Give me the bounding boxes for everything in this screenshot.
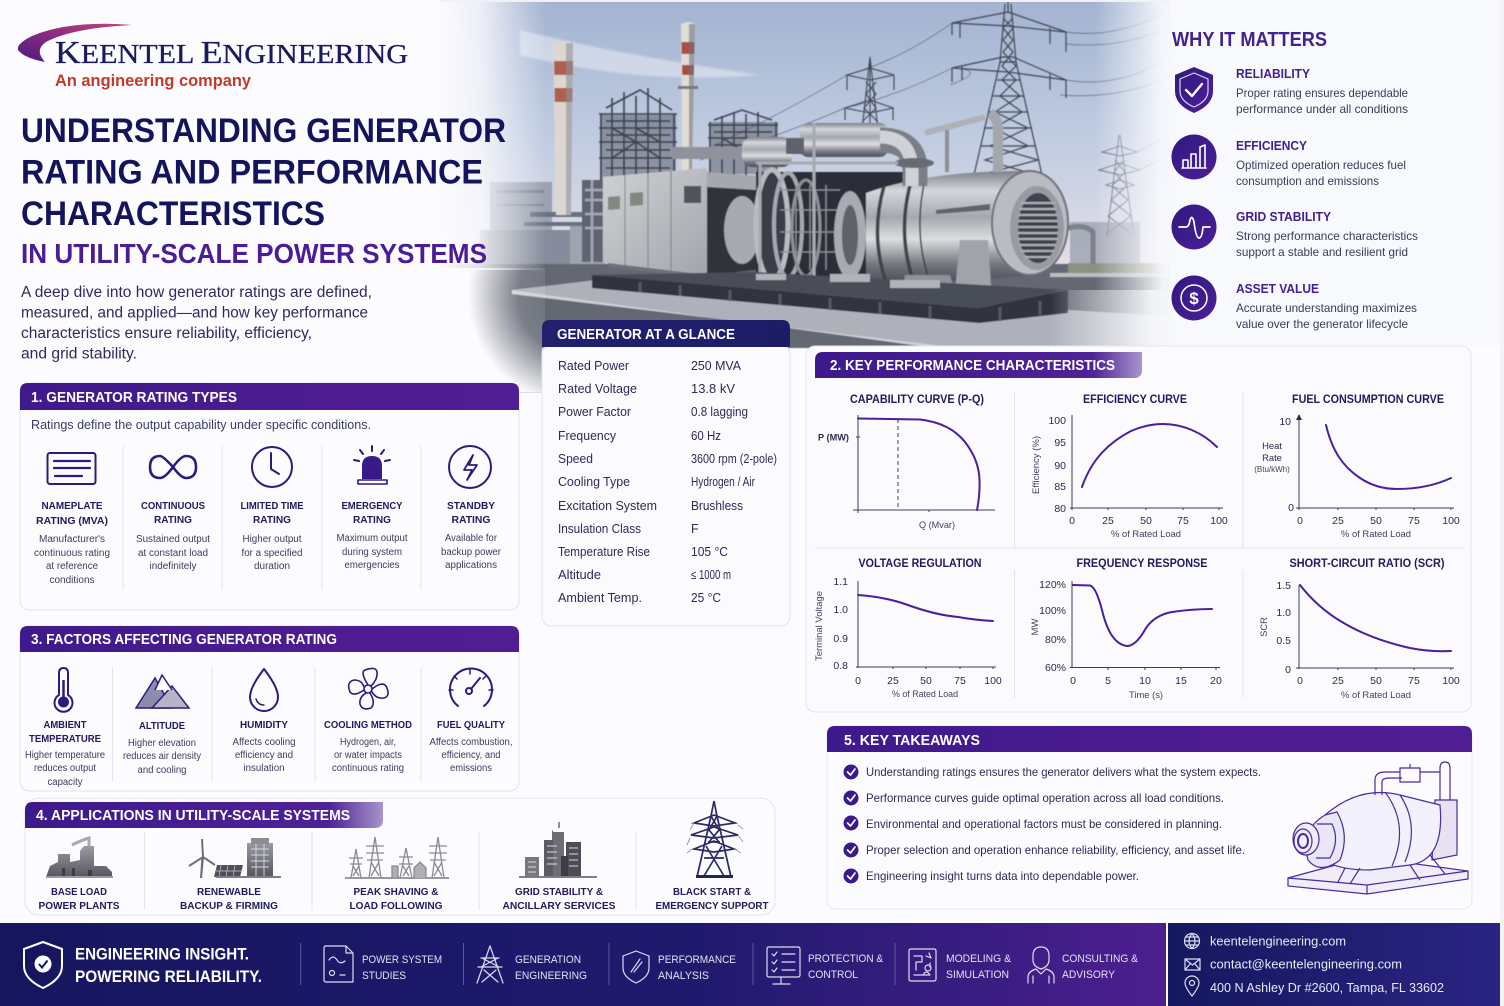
- rating: limited time: LIMITED TIME: [240, 500, 304, 512]
- glance spec table: Cooling Type: [558, 475, 630, 489]
- rating: nameplate: NAMEPLATE: [42, 500, 102, 512]
- chart: short-circuit ratio: 50: [1370, 675, 1382, 687]
- rating: emergency: RATING: [353, 514, 391, 526]
- rating: emergency: Maximum output: [336, 533, 408, 544]
- application: black start: BLACK START &: [673, 886, 751, 898]
- chart: short-circuit ratio: % of Rated Load: [1341, 689, 1411, 700]
- application: base load plants: [38, 838, 120, 912]
- application: renewable backup: BACKUP & FIRMING: [180, 900, 278, 912]
- factor: cooling method: or water impacts: [334, 750, 402, 761]
- factor: ambient temperature: TEMPERATURE: [29, 733, 101, 745]
- rating: standby: STANDBY: [447, 500, 495, 512]
- chart: short-circuit ratio: 75: [1408, 675, 1420, 687]
- glance spec table: 0.8 lagging: [691, 405, 748, 419]
- chart: capability curve: P (MW): [818, 432, 849, 444]
- application: peak shaving: [345, 837, 449, 912]
- chart: efficiency curve: Efficiency (%): [1030, 436, 1041, 494]
- application: peak shaving: LOAD FOLLOWING: [350, 900, 442, 912]
- chart: efficiency curve: 90: [1054, 460, 1066, 472]
- refinery structure two: [708, 110, 778, 175]
- service: generation engineering: GENERATION: [515, 954, 581, 966]
- chart: capability curve: Q (Mvar): [919, 519, 955, 530]
- service: protection and control: PROTECTION &: [808, 953, 884, 965]
- chart: efficiency curve: 75: [1177, 515, 1189, 527]
- service: power system studies: [324, 946, 442, 982]
- rating: limited time: duration: [254, 561, 290, 572]
- footer slogan: ENGINEERING INSIGHT.: [75, 946, 249, 964]
- intro paragraph: A deep dive into how generator ratings are defined,: [21, 284, 372, 301]
- chart: frequency response: 0: [1070, 675, 1076, 687]
- chart: frequency response: MW: [1029, 619, 1040, 635]
- intro paragraph: [21, 284, 372, 362]
- factor: cooling method: COOLING METHOD: [324, 719, 412, 731]
- factor: humidity: Affects cooling: [232, 737, 296, 748]
- glance spec table: Excitation System: [558, 499, 657, 513]
- chart: efficiency curve: 100: [1210, 515, 1228, 527]
- chart: frequency response: 80%: [1045, 634, 1066, 646]
- factor: fuel quality: emissions: [450, 763, 492, 774]
- glance spec table: Brushless: [691, 499, 743, 513]
- service: protection and control: CONTROL: [808, 969, 858, 981]
- factor: fuel quality: Affects combustion,: [430, 737, 512, 748]
- chart: frequency response: 120%: [1039, 579, 1066, 591]
- glance spec table: Rated Power: [558, 359, 629, 373]
- chart: efficiency curve: 80: [1054, 503, 1066, 515]
- rating: continuous: CONTINUOUS: [141, 500, 205, 512]
- rating: continuous: Sustained output: [136, 534, 210, 545]
- transmission tower right: [1099, 135, 1139, 236]
- concrete pad: [512, 280, 1180, 348]
- factor: altitude: reduces air density: [123, 751, 201, 762]
- chart: frequency response: [1029, 558, 1222, 700]
- chart: frequency response: 60%: [1045, 662, 1066, 674]
- chart: short-circuit ratio: 1.0: [1276, 607, 1291, 619]
- rating: limited time: RATING: [253, 514, 291, 526]
- upper exhaust pipes: [742, 113, 998, 278]
- glance spec table: [558, 359, 777, 605]
- chart: efficiency curve: % of Rated Load: [1111, 528, 1181, 539]
- service: consulting and advisory: ADVISORY: [1062, 969, 1116, 981]
- rating: nameplate: Manufacturer's: [39, 534, 105, 545]
- service: generation engineering: ENGINEERING: [515, 970, 587, 982]
- service: modeling and simulation: [909, 949, 1012, 981]
- factor: ambient temperature: capacity: [48, 777, 82, 788]
- rating: nameplate: at reference: [46, 561, 98, 572]
- chart: frequency response: FREQUENCY RESPONSE: [1076, 558, 1208, 570]
- rating: continuous: at constant load: [138, 548, 208, 559]
- chart: voltage regulation: 75: [954, 675, 966, 687]
- rating: emergency: during system: [342, 547, 402, 558]
- rating: standby: Available for: [445, 533, 498, 544]
- panel: 2 key performance characteristics: 2. KEY PERFORMANCE CHARACTERISTICS: [830, 358, 1115, 374]
- title: RATING AND PERFORMANCE: [21, 154, 483, 192]
- takeaway list: Understanding ratings ensures the generator delivers what the system expects.: [866, 766, 1261, 779]
- chart: frequency response: 15: [1175, 675, 1187, 687]
- service: power system studies: STUDIES: [362, 970, 406, 982]
- logo wordmark: KEENTEL ENGINEERING: [55, 34, 408, 70]
- turbine drum and rings: [724, 170, 925, 280]
- application: peak shaving: PEAK SHAVING &: [354, 886, 439, 898]
- company logo: [18, 24, 408, 90]
- factor: ambient temperature: reduces output: [34, 763, 96, 774]
- skid base: [592, 272, 1068, 323]
- factor: cooling method: Hydrogen, air,: [340, 737, 396, 748]
- section 1 intro: Ratings define the output capability under specific conditions.: [31, 418, 371, 432]
- application: base load plants: POWER PLANTS: [38, 900, 120, 912]
- section 5 header: [827, 726, 1472, 752]
- chart: frequency response: Time (s): [1129, 689, 1163, 700]
- rating: limited time: Higher output: [242, 534, 302, 545]
- rating: standby: [441, 446, 502, 571]
- footer contact background: [1168, 923, 1500, 1006]
- chart: short-circuit ratio: [1258, 558, 1460, 700]
- chart: short-circuit ratio: SHORT-CIRCUIT RATIO (SCR): [1290, 558, 1445, 570]
- item: reliability: [1175, 66, 1408, 116]
- chimney right: [678, 22, 698, 170]
- item: reliability: performance under all conditions: [1236, 102, 1408, 116]
- service: performance analysis: PERFORMANCE: [658, 954, 736, 966]
- section 4 header: [25, 802, 383, 828]
- chart: short-circuit ratio: SCR: [1258, 617, 1269, 637]
- panel: 4 applications: [25, 798, 775, 915]
- application: renewable backup: RENEWABLE: [197, 886, 261, 898]
- item: grid stability: GRID STABILITY: [1236, 209, 1331, 224]
- chart: frequency response: 5: [1105, 675, 1111, 687]
- generator line illustration: [1288, 762, 1468, 894]
- chart: voltage regulation: [813, 558, 1002, 699]
- panel: 3 factors affecting generator rating: 3. FACTORS AFFECTING GENERATOR RATING: [31, 632, 337, 648]
- chart: fuel consumption curve: 10: [1279, 416, 1291, 428]
- glance spec table: Hydrogen / Air: [691, 475, 755, 489]
- section 1 header: [20, 383, 519, 410]
- panel: 5 key takeaways: [827, 726, 1472, 909]
- control cabinet: [603, 168, 756, 279]
- application: base load plants: BASE LOAD: [51, 886, 107, 898]
- panel: generator at a glance: GENERATOR AT A GLANCE: [557, 327, 735, 343]
- chart: fuel consumption curve: % of Rated Load: [1341, 528, 1411, 539]
- factor: humidity: insulation: [244, 763, 284, 774]
- item: reliability: RELIABILITY: [1236, 66, 1310, 81]
- factor: humidity: HUMIDITY: [240, 719, 288, 731]
- chart: voltage regulation: 1.0: [833, 604, 848, 616]
- chart: short-circuit ratio: 25: [1332, 675, 1344, 687]
- panel: generator at a glance: [542, 320, 790, 626]
- service: generation engineering: [477, 946, 587, 983]
- factor: fuel quality: FUEL QUALITY: [437, 719, 505, 731]
- panel: 3 factors affecting generator rating: [20, 626, 519, 791]
- chart: capability curve: [818, 394, 995, 530]
- rating: continuous: indefinitely: [150, 561, 196, 572]
- service: protection and control: [767, 947, 884, 984]
- chart: short-circuit ratio: 1.5: [1276, 580, 1291, 592]
- contact: email: contact@keentelengineering.com: [1210, 958, 1402, 972]
- chart: voltage regulation: % of Rated Load: [892, 688, 958, 699]
- service: modeling and simulation: MODELING &: [946, 953, 1012, 965]
- glance spec table: 3600 rpm (2-pole): [691, 452, 777, 466]
- chart: short-circuit ratio: 0: [1297, 675, 1303, 687]
- transmission tower middle: [845, 57, 894, 130]
- factor: altitude: Higher elevation: [128, 738, 196, 749]
- footer band: [0, 923, 1500, 1006]
- title: CHARACTERISTICS: [21, 195, 325, 233]
- item: efficiency: consumption and emissions: [1236, 174, 1379, 188]
- factor: ambient temperature: [25, 668, 105, 788]
- ground and road: [440, 222, 1180, 392]
- rating: continuous: RATING: [154, 514, 192, 526]
- item: asset value: $: [1189, 289, 1199, 308]
- chart: efficiency curve: 100: [1048, 415, 1066, 427]
- chart: voltage regulation: VOLTAGE REGULATION: [858, 558, 982, 570]
- item: grid stability: [1172, 204, 1418, 259]
- footer slogan: [75, 946, 262, 986]
- takeaway list: Performance curves guide optimal operation across all load conditions.: [866, 792, 1224, 805]
- footer slogan: POWERING RELIABILITY.: [75, 968, 262, 986]
- chart: fuel consumption curve: 75: [1408, 515, 1420, 527]
- chart: short-circuit ratio: 0.5: [1276, 635, 1291, 647]
- item: efficiency: [1172, 134, 1406, 188]
- connector pipe: [672, 147, 745, 159]
- takeaway list: Environmental and operational factors must be considered in planning.: [866, 818, 1222, 831]
- factor: humidity: efficiency and: [235, 750, 293, 761]
- factor: cooling method: [324, 668, 412, 774]
- chart: fuel consumption curve: 50: [1370, 515, 1382, 527]
- contact: website: keentelengineering.com: [1210, 934, 1346, 948]
- item: asset value: value over the generator lifecycle: [1236, 317, 1408, 331]
- rating: emergency: [336, 446, 408, 571]
- glance spec table: 60 Hz: [691, 429, 721, 443]
- glance spec table: 13.8 kV: [691, 382, 736, 396]
- panel: why it matters: [1172, 29, 1418, 331]
- factor: altitude: and cooling: [138, 765, 186, 776]
- panel: 2 key performance characteristics: [806, 346, 1471, 712]
- chart: fuel consumption curve: 25: [1332, 515, 1344, 527]
- chart: fuel consumption curve: FUEL CONSUMPTION CURVE: [1292, 394, 1444, 406]
- hero image: power plant and generator: [436, 0, 1185, 392]
- chart: efficiency curve: 25: [1102, 515, 1114, 527]
- rating: nameplate: continuous rating: [34, 548, 110, 559]
- fade overlays: [436, 0, 546, 270]
- chart: fuel consumption curve: Heat: [1262, 440, 1282, 451]
- glance spec table: F: [691, 522, 699, 536]
- glance spec table: 25 °C: [691, 591, 721, 605]
- chart: fuel consumption curve: Rate: [1262, 452, 1282, 463]
- contact: address: 400 N Ashley Dr #2600, Tampa, FL 33602: [1210, 981, 1444, 995]
- item: grid stability: Strong performance characteristics: [1236, 229, 1418, 243]
- chart: short-circuit ratio: 100: [1442, 675, 1460, 687]
- chart: fuel consumption curve: [1254, 394, 1460, 539]
- item: efficiency: Optimized operation reduces fuel: [1236, 158, 1406, 172]
- chart: voltage regulation: 0.8: [833, 660, 848, 672]
- application: grid stability: [502, 822, 616, 912]
- factor: cooling method: continuous rating: [332, 763, 404, 774]
- intro paragraph: and grid stability.: [21, 346, 137, 362]
- application: grid stability: GRID STABILITY &: [515, 886, 603, 898]
- takeaway list: [844, 764, 1261, 884]
- panel: 1 generator rating types: 1. GENERATOR RATING TYPES: [31, 390, 237, 406]
- item: asset value: [1172, 276, 1417, 331]
- section 2 header: [815, 352, 1142, 378]
- glance spec table: Power Factor: [558, 405, 631, 419]
- rating: nameplate: [34, 453, 110, 586]
- chart: short-circuit ratio: 0: [1285, 664, 1291, 676]
- chart: efficiency curve: 95: [1054, 437, 1066, 449]
- chart: fuel consumption curve: 0: [1288, 502, 1294, 514]
- chart: voltage regulation: 25: [887, 675, 899, 687]
- chart: fuel consumption curve: 100: [1442, 515, 1460, 527]
- chart: voltage regulation: 0.9: [833, 633, 848, 645]
- chart: fuel consumption curve: (Btu/kWh): [1254, 465, 1290, 474]
- glance spec table: Altitude: [558, 568, 601, 582]
- chart: capability curve: CAPABILITY CURVE (P-Q): [850, 394, 984, 406]
- factor: altitude: [123, 675, 201, 776]
- glance spec table: Ambient Temp.: [558, 591, 642, 605]
- chimney left: [553, 41, 573, 215]
- factor: ambient temperature: Higher temperature: [25, 750, 105, 761]
- glance spec table: Rated Voltage: [558, 382, 637, 396]
- chart: efficiency curve: 85: [1054, 481, 1066, 493]
- rating: nameplate: RATING (MVA): [36, 515, 108, 527]
- item: reliability: Proper rating ensures dependable: [1236, 86, 1408, 100]
- rating: nameplate: conditions: [50, 575, 94, 586]
- service: consulting and advisory: CONSULTING &: [1062, 953, 1139, 965]
- factor: fuel quality: efficiency, and: [442, 750, 500, 761]
- glance spec table: Frequency: [558, 429, 617, 443]
- generator main cylinder: [866, 171, 1068, 303]
- factor: humidity: [232, 669, 296, 774]
- panel: 1 generator rating types: [20, 383, 519, 610]
- chart: frequency response: 10: [1139, 675, 1151, 687]
- glance spec table: 250 MVA: [691, 359, 742, 373]
- factor: fuel quality: [430, 669, 512, 774]
- chart: voltage regulation: 1.1: [833, 576, 848, 588]
- application: renewable backup: [180, 838, 281, 912]
- background industrial building: [480, 182, 605, 264]
- chart: efficiency curve: EFFICIENCY CURVE: [1083, 394, 1187, 406]
- application: grid stability: ANCILLARY SERVICES: [502, 900, 616, 912]
- section 3 header: [20, 626, 519, 652]
- item: asset value: ASSET VALUE: [1236, 281, 1319, 296]
- glance header: [542, 320, 790, 347]
- glance spec table: 105 °C: [691, 545, 728, 559]
- glance spec table: Speed: [558, 452, 593, 466]
- intro paragraph: measured, and applied—and how key performance: [21, 304, 368, 322]
- rating: continuous: [136, 456, 210, 572]
- subtitle: IN UTILITY-SCALE POWER SYSTEMS: [21, 238, 487, 269]
- why it matters heading: WHY IT MATTERS: [1172, 29, 1327, 51]
- service: power system studies: POWER SYSTEM: [362, 954, 442, 966]
- factor: altitude: ALTITUDE: [139, 720, 185, 732]
- intro paragraph: characteristics ensure reliability, efficiency,: [21, 325, 312, 342]
- panel: 4 applications: 4. APPLICATIONS IN UTILITY-SCALE SYSTEMS: [36, 808, 350, 824]
- service: performance analysis: [623, 951, 736, 983]
- rating: emergency: EMERGENCY: [342, 500, 402, 512]
- footer shield icon: [24, 942, 62, 988]
- service: consulting and advisory: [1028, 947, 1139, 983]
- rating: standby: applications: [445, 560, 497, 571]
- contact: address: [1185, 976, 1444, 996]
- title: [21, 112, 506, 233]
- chart: voltage regulation: 100: [984, 675, 1002, 687]
- chart: frequency response: 20: [1210, 675, 1222, 687]
- chart: voltage regulation: 0: [855, 675, 861, 687]
- factor: ambient temperature: AMBIENT: [44, 719, 87, 731]
- chart: voltage regulation: 50: [920, 675, 932, 687]
- title: UNDERSTANDING GENERATOR: [21, 112, 506, 150]
- logo tagline: An angineering company: [55, 72, 252, 90]
- rating: limited time: [240, 447, 304, 572]
- glance spec table: Insulation Class: [558, 522, 641, 536]
- service: performance analysis: ANALYSIS: [658, 970, 709, 982]
- rating: limited time: for a specified: [242, 548, 302, 559]
- chart: fuel consumption curve: 0: [1297, 515, 1303, 527]
- application: black start: [656, 801, 769, 912]
- chart: efficiency curve: [1030, 394, 1228, 539]
- takeaway list: Engineering insight turns data into dependable power.: [866, 870, 1139, 883]
- rating: standby: backup power: [441, 547, 502, 558]
- glance spec table: ≤ 1000 m: [691, 568, 731, 582]
- rating: standby: RATING: [452, 514, 490, 526]
- rating: emergency: emergencies: [344, 560, 400, 571]
- item: grid stability: support a stable and resilient grid: [1236, 245, 1408, 259]
- chart: efficiency curve: 0: [1069, 515, 1075, 527]
- chart: voltage regulation: Terminal Voltage: [813, 591, 824, 661]
- application: black start: EMERGENCY SUPPORT: [656, 900, 769, 912]
- chart: efficiency curve: 50: [1140, 515, 1152, 527]
- item: efficiency: EFFICIENCY: [1236, 138, 1307, 153]
- takeaway list: Proper selection and operation enhance reliability, efficiency, and asset life.: [866, 844, 1245, 857]
- refinery structure one: [582, 88, 682, 262]
- glance spec table: Temperature Rise: [558, 545, 650, 559]
- service: modeling and simulation: SIMULATION: [946, 969, 1009, 981]
- logo swoosh: [18, 24, 133, 62]
- power lines: [700, 5, 1180, 170]
- item: asset value: Accurate understanding maximizes: [1236, 301, 1417, 315]
- chart: frequency response: 100%: [1039, 605, 1066, 617]
- transmission tower main: [952, 2, 1066, 175]
- panel: 5 key takeaways: 5. KEY TAKEAWAYS: [844, 733, 980, 749]
